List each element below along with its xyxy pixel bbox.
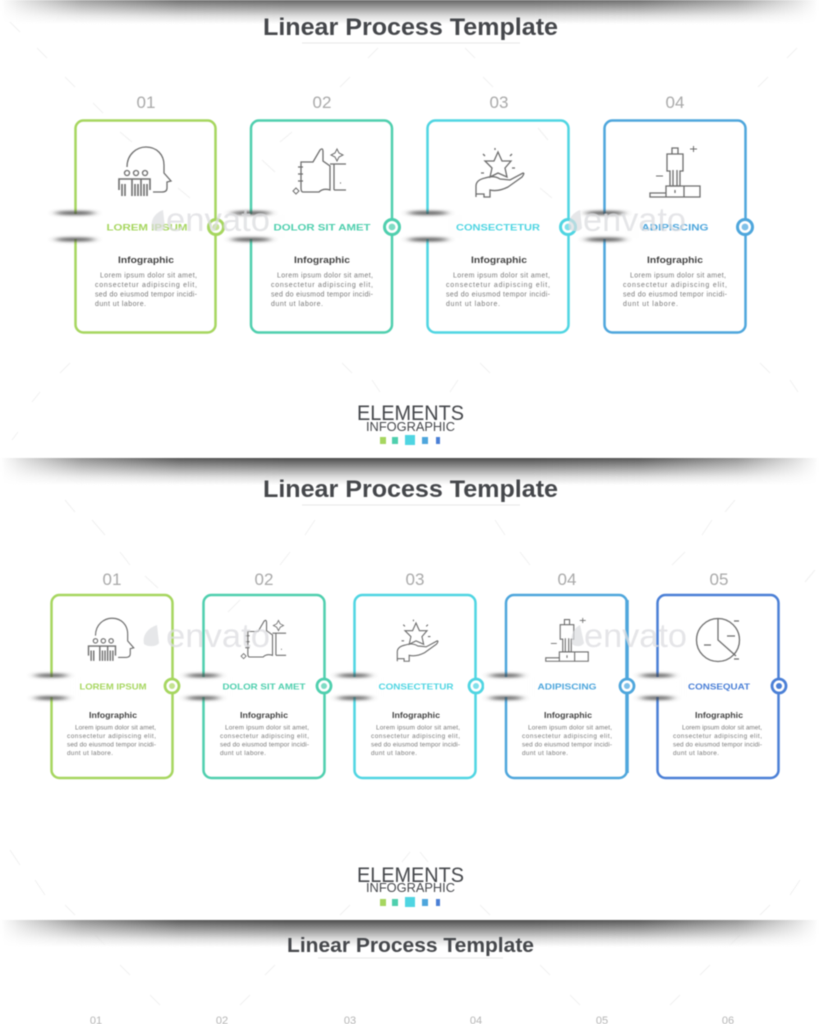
step 05: Infographic (695, 711, 744, 720)
shadow band 2 (0, 458, 819, 485)
step 01: sed do eiusmod tempor incidi- (67, 742, 156, 748)
step 01: 01 (137, 93, 155, 112)
step 01 (30, 570, 179, 778)
step 05: consectetur adipiscing elit, (673, 733, 762, 740)
step 05: Lorem ipsum dolor sit amet, (682, 724, 762, 732)
step 04: sed do eiusmod tempor incidi- (522, 742, 612, 748)
step 02: Infographic (294, 255, 350, 265)
step 02: DOLOR SIT AMET (274, 222, 371, 234)
step 03: sed do eiusmod tempor incidi- (446, 292, 551, 298)
logo 1: INFOGRAPHIC (366, 420, 455, 434)
step 03: Infographic (392, 711, 441, 720)
step 02: Lorem ipsum dolor sit amet, (225, 724, 309, 732)
step 02: 02 (255, 570, 273, 589)
step 04: ADIPISCING (538, 682, 597, 692)
step 04: ADIPISCING (642, 222, 708, 234)
title 1: Linear Process Template (263, 14, 558, 41)
step 03 (403, 93, 576, 332)
watermark row 1 (152, 201, 686, 238)
step 01: LOREM IPSUM (106, 222, 188, 234)
step 04: Infographic (544, 711, 593, 720)
step 01: consectetur adipiscing elit, (67, 733, 156, 740)
process row 1 (50, 93, 752, 332)
step 02 (182, 570, 331, 778)
step 04: consectetur adipiscing elit, (623, 282, 727, 289)
step 03: 03 (406, 570, 424, 589)
step 03: sed do eiusmod tempor incidi- (371, 742, 460, 748)
step 03: 03 (490, 93, 508, 112)
step 04: dunt ut labore. (623, 301, 678, 308)
step 01: Infographic (118, 255, 174, 265)
step 05: dunt ut labore. (673, 750, 719, 757)
step 01: LOREM IPSUM (80, 682, 146, 692)
step 02: sed do eiusmod tempor incidi- (220, 742, 309, 748)
step 03: dunt ut labore. (371, 750, 417, 757)
step 05 (636, 570, 786, 778)
step 04: Lorem ipsum dolor sit amet, (630, 272, 726, 280)
step 04 (484, 570, 634, 778)
step 02: dunt ut labore. (220, 750, 266, 757)
step 02 (226, 93, 400, 332)
process row 2 (30, 570, 786, 778)
step 04: consectetur adipiscing elit, (522, 733, 612, 740)
icon: pie chart (696, 618, 740, 662)
step 01: consectetur adipiscing elit, (95, 282, 197, 289)
step 02: 02 (313, 93, 331, 112)
step 03: CONSECTETUR (378, 682, 454, 692)
logo 2: ELEMENTS (357, 864, 464, 887)
logo 1: ELEMENTS (357, 402, 464, 425)
watermark row 1: envato (583, 201, 686, 238)
step 01: Infographic (89, 711, 138, 720)
shadow band 3 (0, 920, 819, 947)
watermark row 2 (144, 617, 687, 654)
step 04: Lorem ipsum dolor sit amet, (528, 724, 612, 732)
title 2: Linear Process Template (263, 476, 558, 503)
step 02: consectetur adipiscing elit, (271, 282, 373, 289)
watermark row 2: envato (166, 617, 270, 654)
step 03: Lorem ipsum dolor sit amet, (376, 724, 460, 732)
watermark row 1: envato (166, 201, 270, 238)
step 03: consectetur adipiscing elit, (371, 733, 460, 740)
step 02: sed do eiusmod tempor incidi- (271, 292, 374, 298)
step 04: 04 (558, 570, 576, 589)
step 01: dunt ut labore. (67, 750, 113, 757)
step 04: dunt ut labore. (522, 750, 568, 757)
step 02: consectetur adipiscing elit, (220, 733, 309, 740)
step 04 (580, 93, 752, 332)
step 02: DOLOR SIT AMET (222, 682, 306, 692)
step numbers row 3 (90, 1015, 734, 1024)
step 02: Lorem ipsum dolor sit amet, (277, 272, 373, 280)
step 01 (50, 93, 224, 332)
step 04: 04 (666, 93, 684, 112)
logo 2: INFOGRAPHIC (366, 881, 455, 895)
logo 1 (357, 402, 464, 445)
step 01: dunt ut labore. (95, 301, 146, 308)
step 03: Infographic (471, 255, 527, 265)
title 3: Linear Process Template (287, 935, 534, 957)
shadow band 1 (0, 0, 819, 24)
step 05: 05 (710, 570, 728, 589)
step 03: CONSECTETUR (456, 222, 540, 234)
step 02: Infographic (240, 711, 289, 720)
step 03: dunt ut labore. (446, 301, 500, 308)
step 03: consectetur adipiscing elit, (446, 282, 550, 289)
step 05: sed do eiusmod tempor incidi- (673, 742, 762, 748)
step 01: Lorem ipsum dolor sit amet, (75, 724, 156, 732)
step 05: CONSEQUAT (688, 682, 751, 692)
step 03: Lorem ipsum dolor sit amet, (453, 272, 550, 280)
watermark row 2: envato (584, 617, 687, 654)
step 01: sed do eiusmod tempor incidi- (95, 292, 198, 298)
step 04: Infographic (647, 255, 703, 265)
step 01: 01 (103, 570, 121, 589)
step 03 (333, 570, 483, 778)
step 02: dunt ut labore. (271, 301, 323, 308)
step 04: sed do eiusmod tempor incidi- (623, 292, 728, 298)
step 01: Lorem ipsum dolor sit amet, (100, 272, 197, 280)
logo 2 (357, 864, 464, 907)
